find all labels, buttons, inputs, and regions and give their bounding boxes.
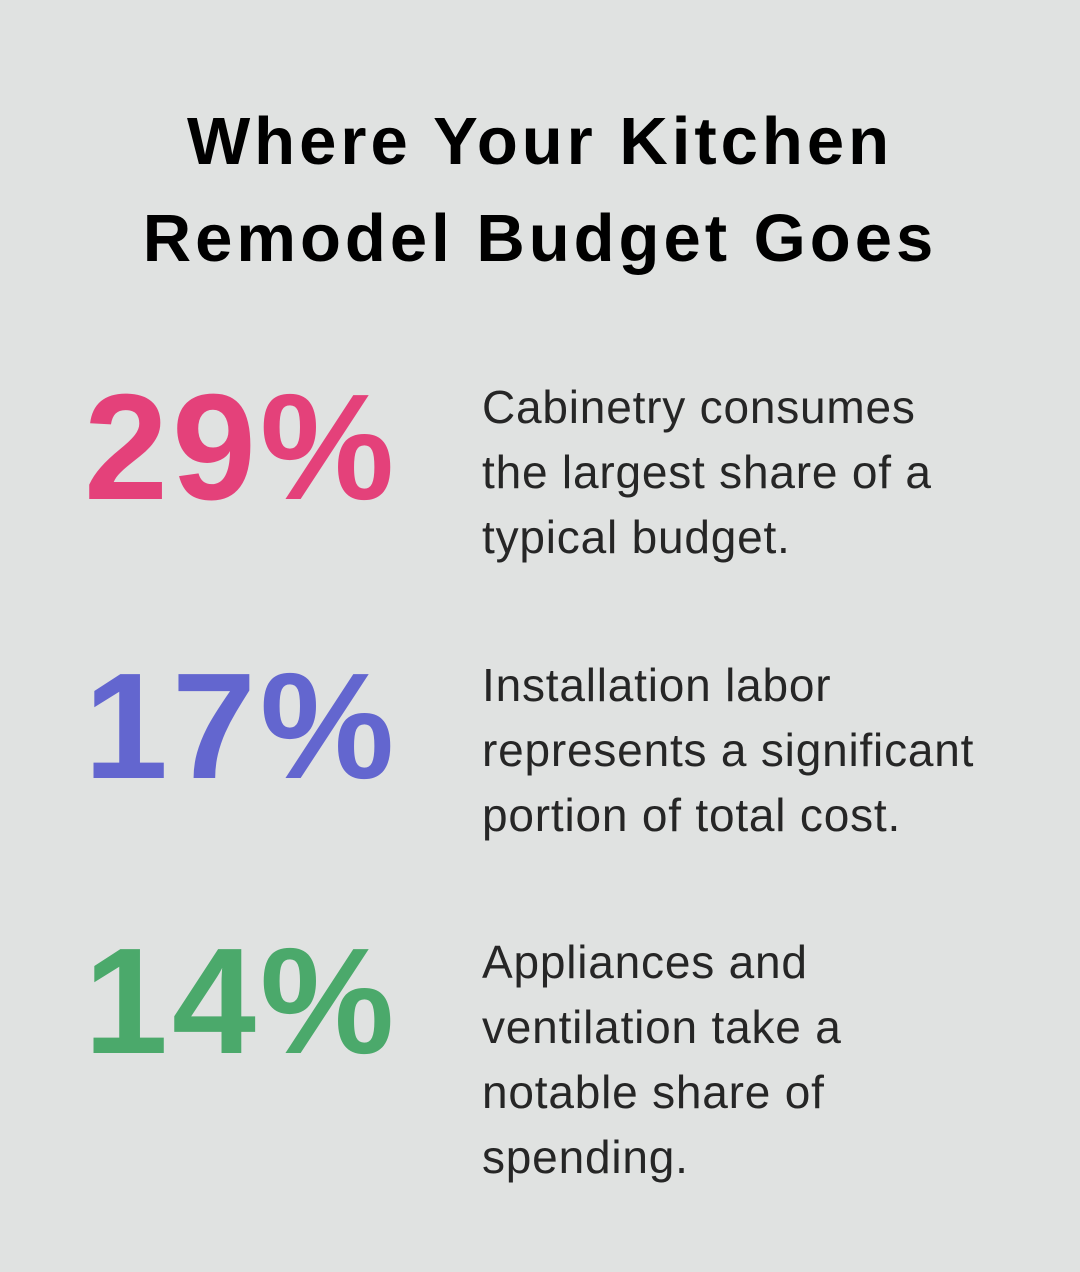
stat: 14%: 14% bbox=[84, 916, 398, 1085]
title bbox=[143, 104, 937, 276]
text: installation: Installation labor bbox=[482, 659, 831, 711]
text: cabinetry: Cabinetry consumes bbox=[482, 381, 916, 433]
text: cabinetry: typical budget. bbox=[482, 511, 791, 563]
text: installation: represents a significant bbox=[482, 724, 974, 776]
stat: 29%: 29% bbox=[84, 362, 398, 531]
text: appliances: ventilation take a bbox=[482, 1001, 842, 1053]
stat: 17%: 17% bbox=[84, 641, 398, 810]
text: appliances bbox=[482, 936, 842, 1183]
text: appliances: Appliances and bbox=[482, 936, 808, 988]
text: installation: portion of total cost. bbox=[482, 789, 901, 841]
text: appliances: notable share of bbox=[482, 1066, 825, 1118]
text: installation bbox=[482, 659, 974, 841]
text: cabinetry bbox=[482, 381, 932, 563]
text: cabinetry: the largest share of a bbox=[482, 446, 932, 498]
text: appliances: spending. bbox=[482, 1131, 689, 1183]
title: Remodel Budget Goes bbox=[143, 201, 937, 276]
title: Where Your Kitchen bbox=[187, 104, 893, 179]
